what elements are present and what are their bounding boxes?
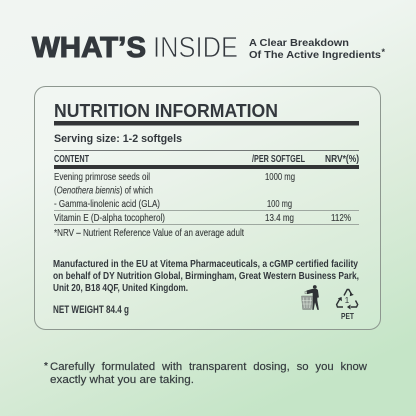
table: nutrition values: [54, 150, 359, 225]
manufacturer text: Unit 20, B18 4QF, United Kingdom.: [53, 283, 188, 294]
panel: nutrition label: [34, 86, 380, 330]
title: INSIDE: [153, 32, 238, 64]
table: nutrition values: 13.4 mg: [265, 213, 294, 224]
subtitle: A Clear Breakdown: [249, 38, 349, 49]
heading: nutrition information: NUTRITION INFORMATION: [54, 100, 278, 121]
table: nutrition values: (Oenothera biennis) of which: [54, 186, 153, 196]
table: nutrition values: 1000 mg: [265, 172, 295, 183]
table: nutrition values: 112%: [331, 213, 351, 224]
table: nutrition values: Evening primrose seeds oil: [54, 172, 150, 183]
footnote: *: [44, 361, 48, 372]
icon: PET recycling: [337, 290, 358, 321]
title: WHAT’S: [32, 32, 146, 64]
table: nutrition values: /PER SOFTGEL: [252, 154, 305, 165]
subtitle: *: [382, 47, 386, 57]
table: nutrition values: Vitamin E (D-alpha tocopherol): [54, 213, 165, 224]
icon: tidy man: [302, 285, 319, 310]
manufacturer text: [53, 259, 359, 294]
serving size: Serving size: 1-2 softgels: [54, 133, 182, 145]
subtitle: Of The Active Ingredients: [249, 50, 381, 61]
footnote: Carefully formulated with transparent dosing, so you know: [50, 361, 367, 373]
footnote: NRV: *NRV – Nutrient Reference Value of an average adult: [54, 228, 244, 239]
footnote: exactly what you are taking.: [50, 374, 194, 386]
heading rule: [54, 121, 359, 126]
icon: PET recycling: PET: [341, 311, 355, 321]
manufacturer text: Manufactured in the EU at Vitema Pharmaceuticals, a cGMP certified facility: [53, 259, 358, 270]
net weight: NET WEIGHT 84.4 g: [53, 304, 129, 316]
table: nutrition values: - Gamma-linolenic acid (GLA): [54, 199, 160, 210]
table: nutrition values: NRV*(%): [325, 154, 359, 165]
footnote: [44, 361, 367, 386]
table: nutrition values: 100 mg: [267, 199, 292, 210]
title: [32, 32, 238, 64]
table: nutrition values: CONTENT: [54, 154, 89, 165]
icon: PET recycling: 1: [345, 296, 350, 305]
subtitle: [249, 38, 386, 61]
